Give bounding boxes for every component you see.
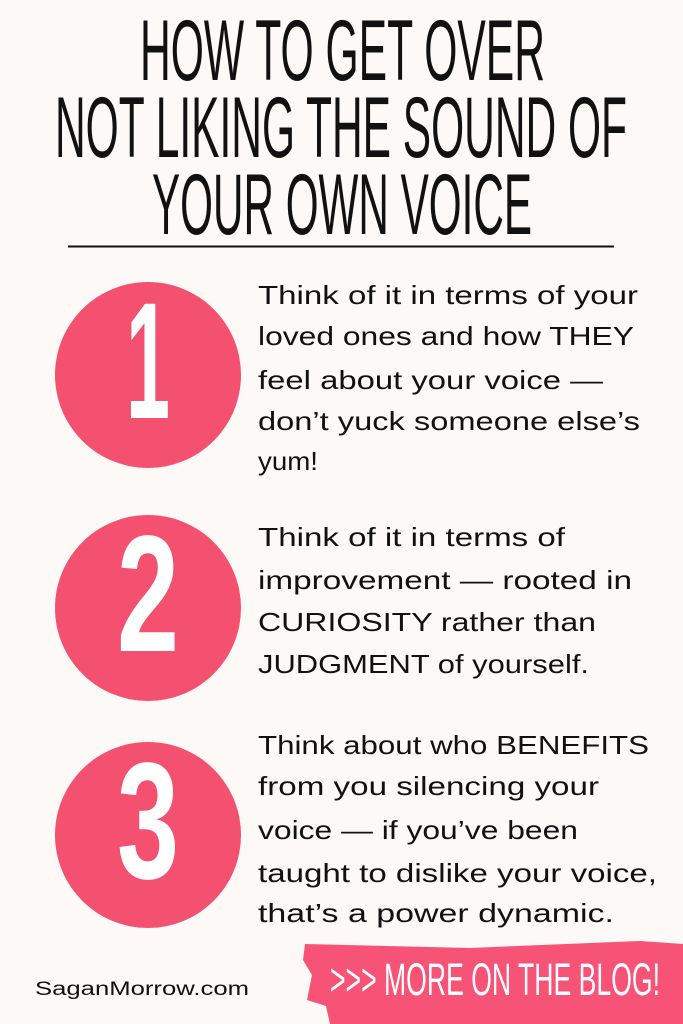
text 1: loved ones and how THEY [258, 321, 634, 351]
text 3: that’s a power dynamic. [258, 898, 614, 928]
icon: number circle 3 [55, 729, 241, 928]
text 3: from you silencing your [258, 771, 599, 801]
banner: more on the blog [303, 941, 683, 1024]
footer: website: SaganMorrow.com [35, 979, 249, 1000]
text 2: Think of it in terms of [258, 522, 566, 552]
icon: number circle 1 [55, 269, 241, 468]
text 1: feel about your voice — [258, 365, 603, 395]
text 2: CURIOSITY rather than [258, 607, 596, 637]
text 3: Think about who BENEFITS [258, 730, 649, 760]
text 1 [258, 280, 640, 476]
item 2 [55, 502, 632, 701]
item 1 [55, 269, 640, 476]
text 3: voice — if you’ve been [258, 815, 578, 845]
icon: number circle 1: 1 [126, 269, 170, 454]
item 3 [55, 729, 657, 928]
icon: number circle 3: 3 [117, 729, 179, 914]
text 2 [258, 522, 632, 679]
text 3: taught to dislike your voice, [258, 858, 657, 888]
icon: number circle 2: 2 [117, 502, 179, 687]
text 1: Think of it in terms of your [258, 280, 638, 310]
text 2: JUDGMENT of yourself. [258, 649, 589, 679]
text 2: improvement — rooted in [258, 565, 632, 595]
icon: number circle 2 [55, 502, 241, 701]
title [55, 3, 627, 253]
text 1: don’t yuck someone else’s [258, 406, 640, 436]
text 3 [258, 730, 657, 928]
text 1: yum! [258, 446, 318, 476]
